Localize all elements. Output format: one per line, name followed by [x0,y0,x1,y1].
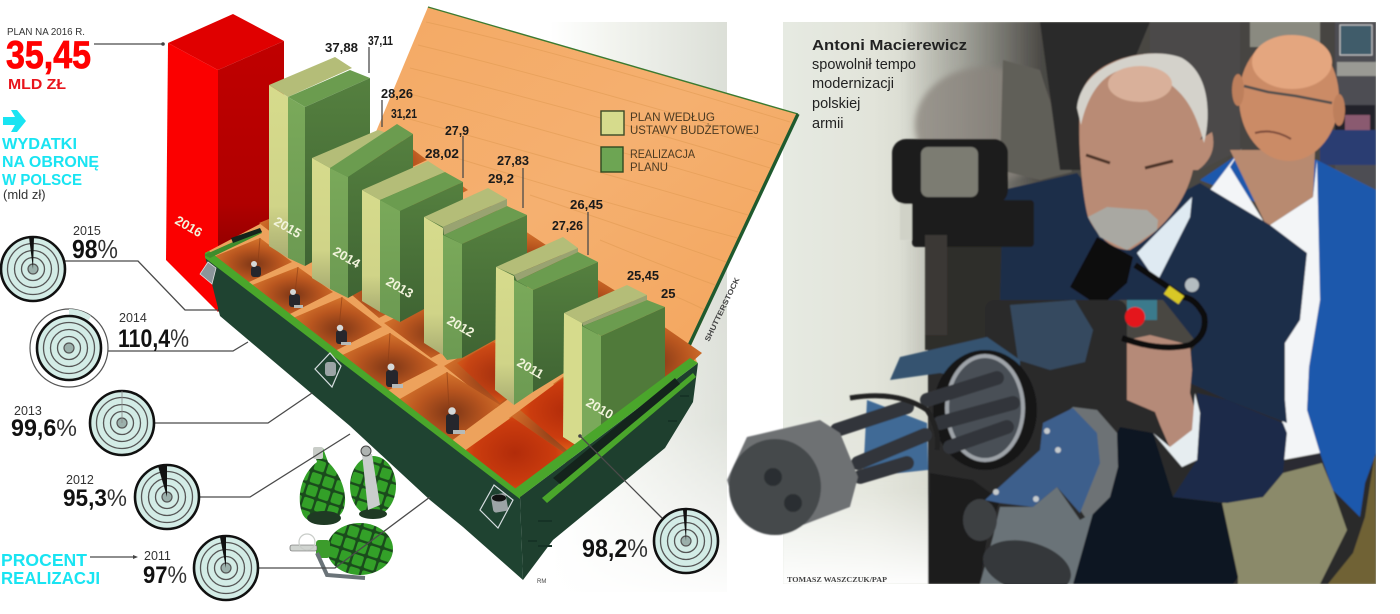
gauge: 2012 95,3%: 2012 [66,473,94,487]
heading: defence spending: W POLSCE [2,172,82,189]
bar values and pointers: 37,88 [325,40,358,55]
photo caption [812,38,967,132]
gauge: 2011 97% [143,536,258,600]
dark mechanism below barrels [928,473,1000,584]
bar: 2013 [362,161,463,322]
bar: 2010: 2010 [584,395,616,422]
photo: Macierewicz with a rotary gun [727,22,1376,603]
gauge: 2011 97%: 2011 [144,549,171,563]
leader lines from gauges to bars [65,261,662,568]
man 2 blue jacket [1200,153,1376,517]
big grenade with silver strap [350,446,396,519]
heading: percent of execution: PROCENT [1,550,87,570]
bar values and pointers: 31,21 [391,106,417,121]
icon: cyan arrow [3,110,26,132]
bar values and pointers: 37,11 [368,33,393,48]
heading: 2016 plan [6,27,91,93]
credit: RM: RM [537,579,546,585]
gauge: 2013 99,6%: 2013 [14,404,42,418]
man 1 jacket upper [1000,173,1307,423]
bar: 2012 [424,188,527,360]
small grenades inside compartments [251,261,465,434]
handle and cable [1122,265,1205,347]
bar: 2011 [495,237,598,405]
man 2 white shirt [1210,148,1320,460]
man 2 head [1232,35,1345,161]
legend: USTAWY BUDŻETOWEJ [630,123,759,137]
photo caption: Antoni Macierewicz [812,38,967,54]
gauge: 2012 95,3% [63,465,199,529]
man 1 sleeve [1173,393,1287,503]
lying grenade with lever [290,523,393,578]
bar values and pointers: 27,83 [497,153,529,168]
heading: 2016 plan: MLD ZŁ [8,76,66,93]
legend [601,110,759,174]
crate outer body with green rims [204,228,698,580]
bar: 2016 plan in red: 2016 [172,213,205,240]
hand and cuff [1127,335,1200,467]
bar: 2013: 2013 [384,274,416,301]
yellow marker [1164,286,1184,304]
photo caption: modernizacji [812,76,894,92]
big grenade left [300,447,345,525]
gauge: 2013 99,6%: 99,6% [11,415,77,442]
heading: 2016 plan: 35,45 [6,34,91,77]
photo credit: TOMASZ WASZCZUK/PAP [787,575,887,584]
gauge: 2014 110,4% [30,309,189,387]
bar values and pointers: 27,26 [552,218,583,233]
heading: percent of execution [1,550,100,588]
heading: percent of execution: REALIZACJI [1,568,100,588]
bar: 2016 plan in red [166,14,284,312]
man 2 belt [1283,453,1322,473]
bar: 2015: 2015 [272,214,304,241]
gun body [1009,298,1158,370]
muzzle [727,420,858,535]
credit: shutterstock: SHUTTERSTOCK [703,275,742,343]
man 2 trousers and camo at right [1222,453,1376,584]
gauge: 2014 110,4%: 110,4% [118,325,189,353]
photo backdrop [783,22,1376,584]
legend: PLAN WEDŁUG [630,110,715,124]
bar: 2015 [269,57,370,266]
arrow: plan leader to red bar [94,42,165,46]
man 1 lower torso [1073,427,1238,584]
gauge: 2010 98,2%: 98,2% [582,535,648,563]
exhaust tube [962,486,1094,584]
crate lid with wood grain [360,7,798,358]
bar values and pointers [325,33,675,301]
legend: REALIZACJA [630,147,695,161]
gauge: 2012 95,3%: 95,3% [63,485,127,512]
crate clasps [200,262,513,528]
bar values and pointers: 25 [661,286,675,301]
bar values and pointers: 26,45 [570,197,603,212]
bar: 2014: 2014 [330,244,364,271]
bar: 2010 [563,285,665,449]
blue drum [985,407,1118,520]
bar values and pointers: 25,45 [627,268,659,283]
gauge: 2015 98% [1,224,118,301]
gauge: 2015 98%: 2015 [73,224,101,238]
gun blue housing [889,336,1021,381]
bar: 2012: 2012 [444,313,477,340]
barrel cluster [837,350,1037,477]
gauge: 2013 99,6% [11,391,154,455]
panel: soft grey backdrop behind the lid [550,22,727,595]
heading: defence spending: WYDATKI [2,136,77,153]
bar values and pointers: 28,26 [381,86,413,101]
man 1 head [1077,54,1213,250]
arrow: percent label to 2011 [90,555,138,559]
gauge: 2011 97%: 97% [143,562,187,589]
photo caption: polskiej [812,96,860,112]
bar values and pointers: 28,02 [425,146,459,161]
bar: 2014 [312,124,413,298]
photo caption: spowolnił tempo [812,57,916,73]
gun grip block [1070,237,1133,307]
gauge: 2014 110,4%: 2014 [119,311,147,325]
man 1 shirt [1137,197,1192,282]
bar values and pointers: 29,2 [488,171,514,186]
photo caption: armii [812,116,843,132]
bar values and pointers: 27,9 [445,123,469,138]
legend: PLANU [630,160,668,174]
gauge: 2010 98,2% [582,509,718,573]
lapel pin [1185,278,1199,292]
man 2 neck [1230,150,1315,227]
bar: 2011: 2011 [514,355,546,382]
heading: defence spending: (mld zł) [3,187,46,202]
gun sight [892,139,1034,335]
crate interior with grid of compartments [205,136,702,497]
gauge: 2015 98%: 98% [72,234,118,264]
heading: 2016 plan: PLAN NA 2016 R. [7,27,85,38]
heading: defence spending: NA OBRONĘ [2,154,99,171]
red button [1125,307,1145,327]
heading: defence spending [2,136,99,202]
